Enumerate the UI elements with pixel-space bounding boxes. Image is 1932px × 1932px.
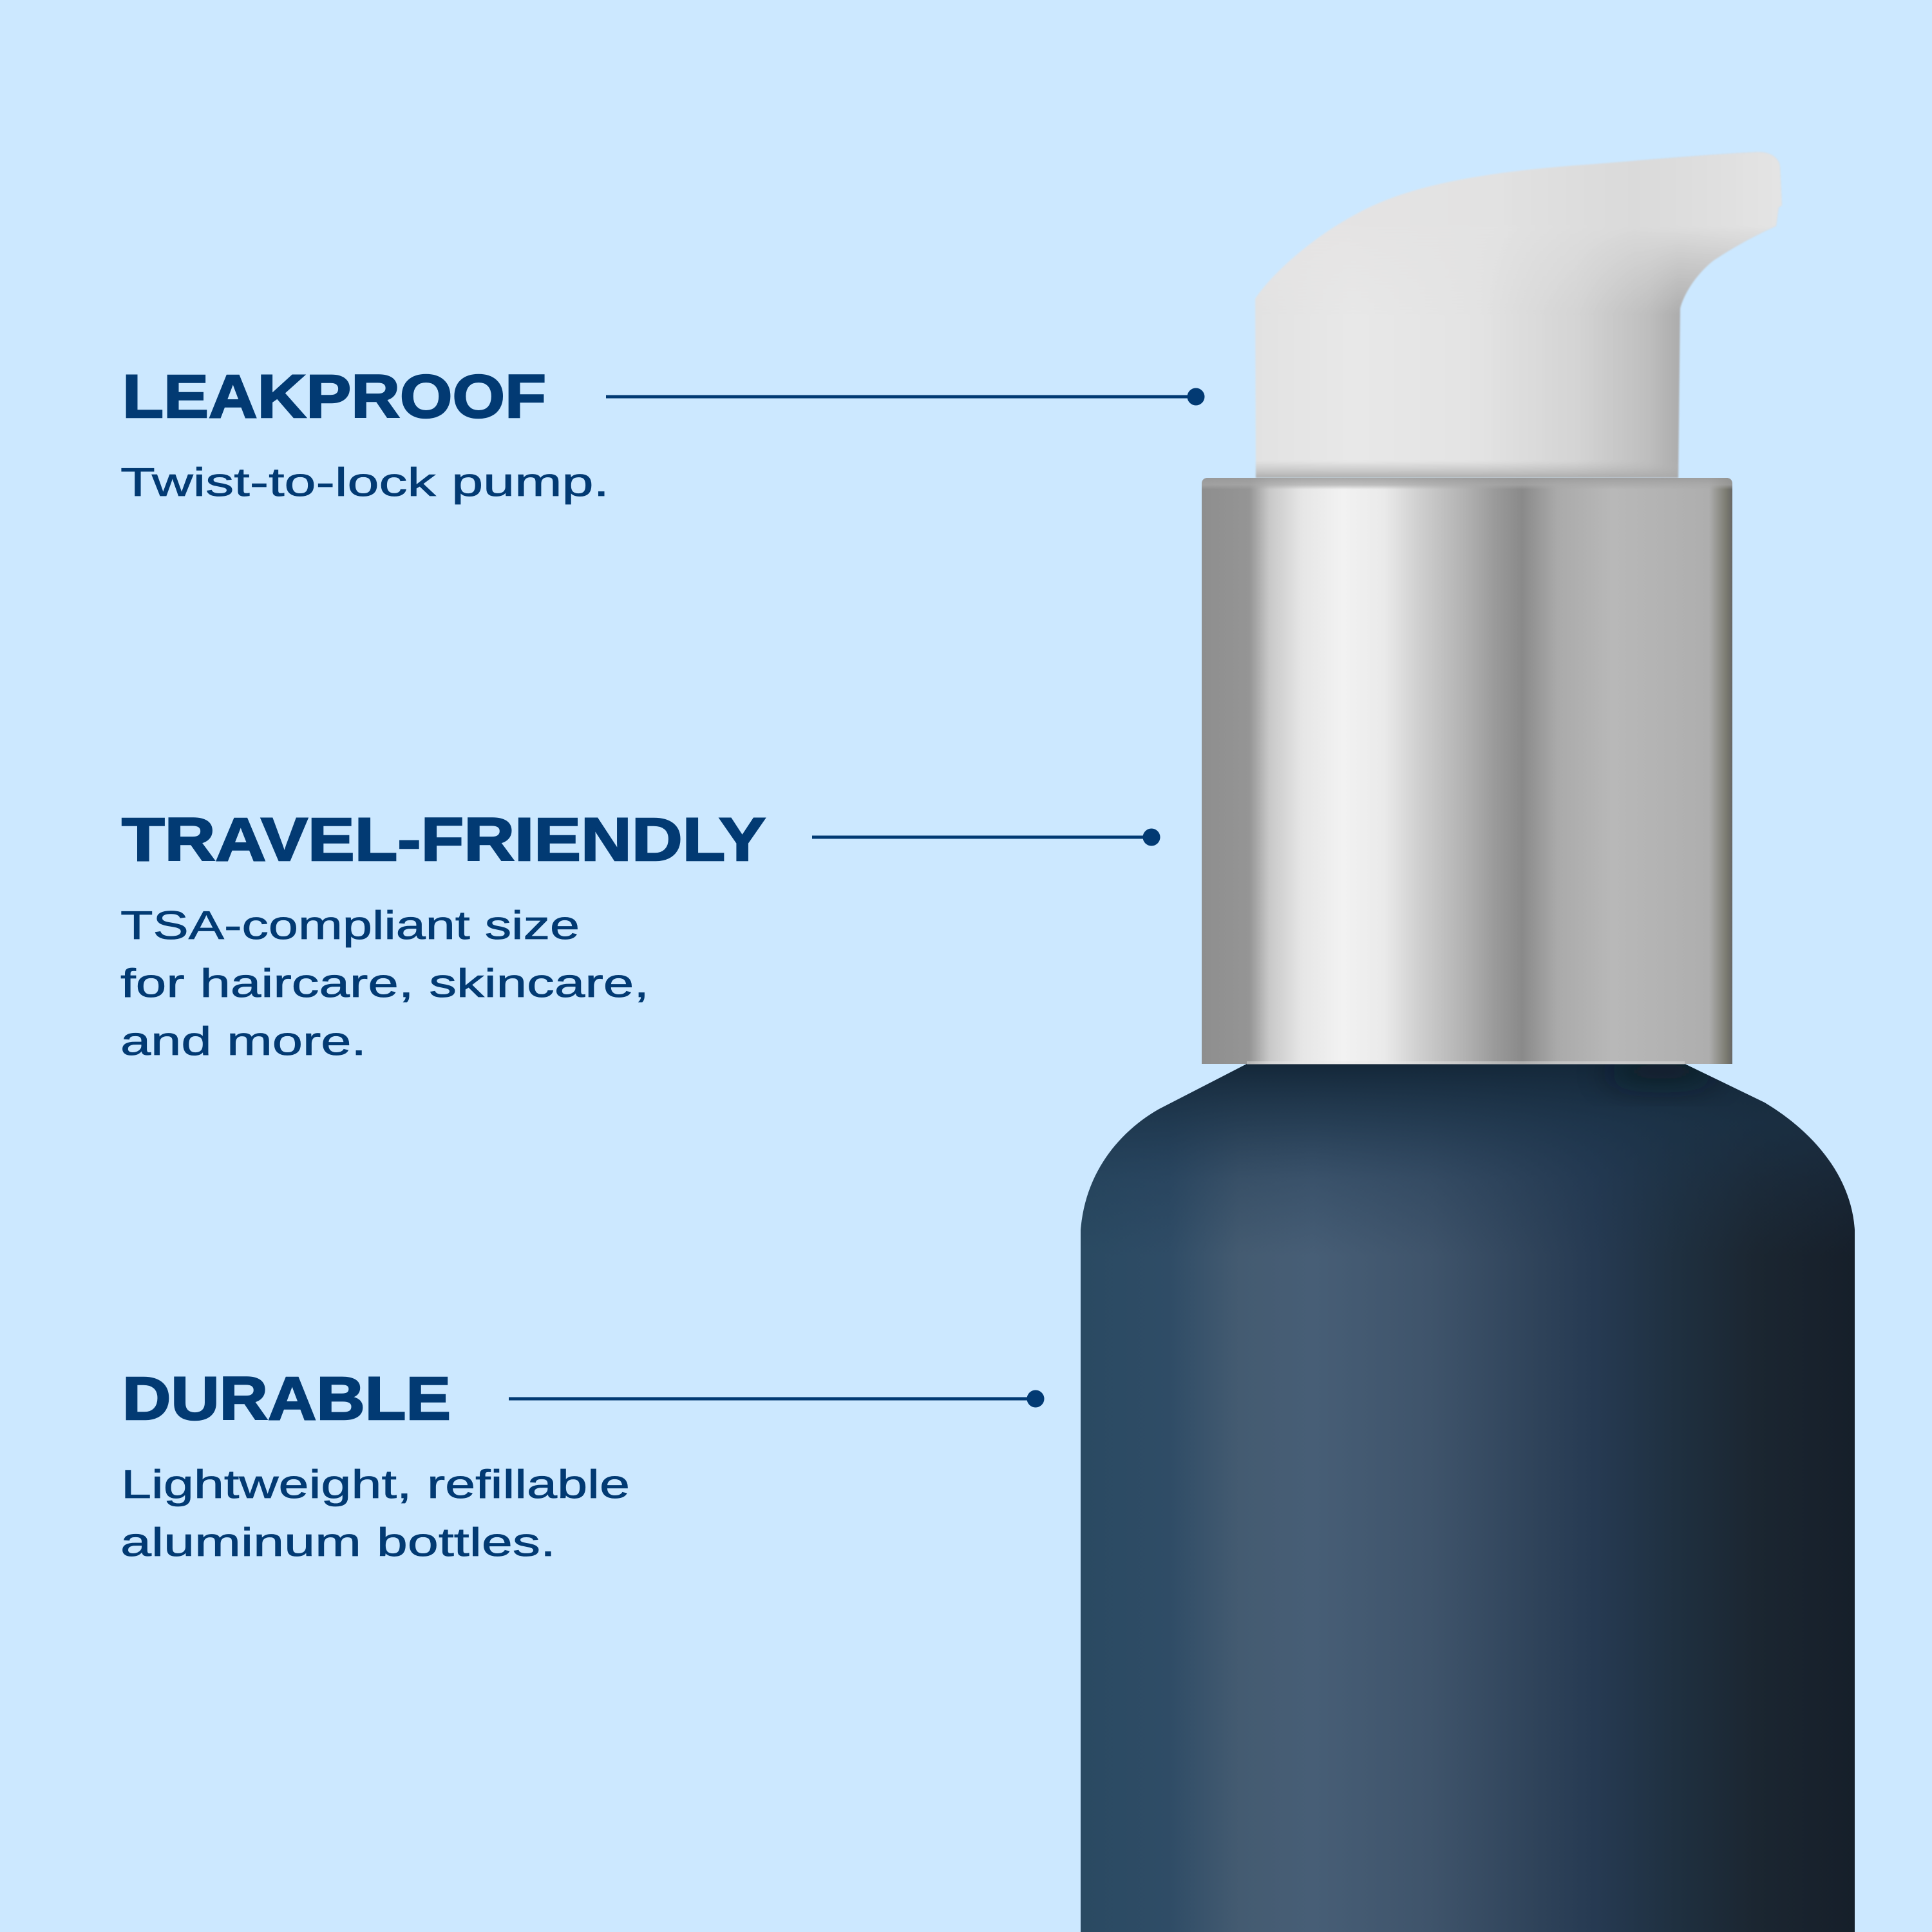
heading: durable: DURABLE xyxy=(122,1365,451,1433)
callout: leakproof xyxy=(120,363,1204,505)
leader line: leakproof xyxy=(606,388,1204,406)
text: durable description: Lightweight, refillable xyxy=(121,1463,630,1507)
callout: durable xyxy=(120,1365,1045,1565)
pump head xyxy=(1249,145,1790,480)
leader line: travel-friendly xyxy=(812,828,1160,846)
callout: travel-friendly xyxy=(120,806,1160,1064)
leader line: durable xyxy=(509,1390,1045,1408)
bottle body xyxy=(1075,1060,1861,1932)
product: pump bottle xyxy=(1075,145,1861,1932)
silver collar xyxy=(1202,478,1732,1065)
text: travel-friendly description xyxy=(120,904,649,1064)
text: durable description xyxy=(120,1463,630,1565)
heading: leakproof: LEAKPROOF xyxy=(122,363,546,431)
text: durable description: aluminum bottles. xyxy=(120,1520,556,1565)
heading: travel-friendly: TRAVEL-FRIENDLY xyxy=(122,806,766,874)
text: travel-friendly description: and more. xyxy=(120,1019,366,1064)
text: travel-friendly description: TSA-compliant size xyxy=(120,904,580,948)
text: travel-friendly description: for haircare, skincare, xyxy=(120,961,649,1006)
text: leakproof description: Twist-to-lock pump. xyxy=(120,460,609,505)
